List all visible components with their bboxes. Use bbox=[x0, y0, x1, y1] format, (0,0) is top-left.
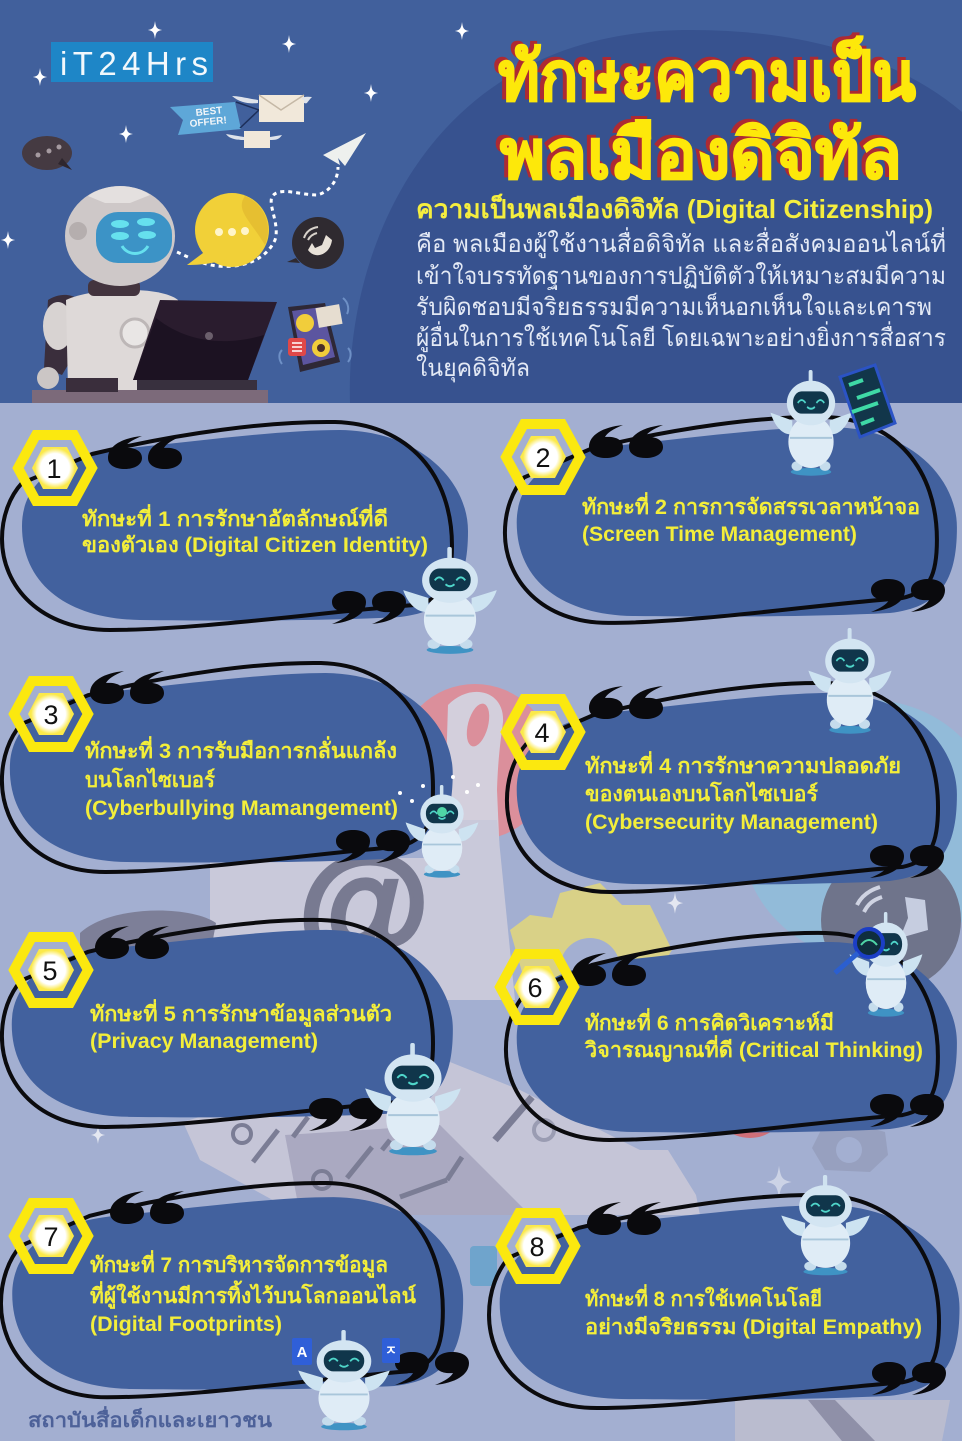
text block: definition: เข้าใจบรรทัดฐานของการปฏิบัติตัวให้เหมาะสมมีความ bbox=[416, 262, 946, 290]
robot 7 with language icons: ㅈ bbox=[385, 1343, 397, 1358]
icon: flying envelopes and offer flag: OFFER! bbox=[189, 115, 227, 130]
icon: flying envelopes and offer flag: BEST bbox=[195, 105, 223, 119]
robot 7 with language icons bbox=[292, 1330, 400, 1430]
text block: definition: ผู้อื่นในการใช้เทคโนโลยี โดยเฉพาะอย่างยิ่งการสื่อสาร bbox=[416, 321, 946, 353]
text block: definition: ในยุคดิจิทัล bbox=[416, 354, 530, 383]
title bbox=[494, 33, 916, 193]
title: พลเมืองดิจิทัล bbox=[496, 114, 898, 190]
icon: dark phone-call bubble bbox=[287, 217, 344, 269]
panel: skill 5: ทักษะที่ 5 การรักษาข้อมูลส่วนตัว bbox=[90, 998, 392, 1028]
icon: flying envelopes and offer flag bbox=[170, 95, 312, 148]
robot 3 with lightbulb bbox=[398, 775, 480, 878]
panel: skill 1 bbox=[2, 422, 468, 630]
panel: skill 2: ทักษะที่ 2 การการจัดสรรเวลาหน้าจอ bbox=[582, 491, 920, 519]
panel: skill 7: 7 bbox=[43, 1222, 59, 1252]
panel: skill 5: (Privacy Management) bbox=[90, 1030, 318, 1053]
panel: skill 2: (Screen Time Management) bbox=[582, 523, 857, 546]
icon: robot with laptop bbox=[32, 186, 277, 403]
panel: skill 5 bbox=[2, 920, 453, 1131]
robot 5 bbox=[365, 1043, 461, 1155]
panel: skill 1: 1 bbox=[46, 454, 62, 484]
robot 7 with language icons: A bbox=[297, 1344, 308, 1361]
panel: skill 4: ทักษะที่ 4 การรักษาความปลอดภัย bbox=[585, 750, 901, 778]
icon: yellow speech bubble bbox=[187, 193, 269, 267]
panel: skill 5: 5 bbox=[42, 956, 58, 986]
robot 2 with tablet bbox=[770, 365, 895, 476]
panel: skill 2: 2 bbox=[535, 443, 551, 473]
panel: skill 8 bbox=[489, 1195, 960, 1408]
panel: skill 7 bbox=[1, 1183, 469, 1397]
robot 8 bbox=[781, 1175, 870, 1275]
panel: skill 3: บนโลกไซเบอร์ bbox=[85, 767, 216, 792]
panel: skill 6: 6 bbox=[527, 973, 543, 1003]
robot 6 with magnifier bbox=[835, 912, 922, 1017]
panel: skill 8: 8 bbox=[529, 1232, 545, 1262]
robot 1 bbox=[403, 547, 497, 654]
panel: skill 3 bbox=[2, 663, 453, 872]
panel: skill 7: ทักษะที่ 7 การบริหารจัดการข้อมูล bbox=[90, 1249, 388, 1279]
text block: definition bbox=[416, 193, 946, 383]
panel: skill 1: ทักษะที่ 1 การรักษาอัตลักษณ์ที่ดี bbox=[82, 503, 388, 531]
logo: iT24Hrs bbox=[60, 45, 208, 82]
panel: skill 6: ทักษะที่ 6 การคิดวิเคราะห์มี bbox=[585, 1007, 834, 1035]
title: พลเมืองดิจิทัล bbox=[500, 117, 902, 193]
panel: skill 4: 4 bbox=[534, 718, 550, 748]
text block: definition: คือ พลเมืองผู้ใช้งานสื่อดิจิทัล และสื่อสังคมออนไลน์ที่ bbox=[416, 227, 946, 259]
icon: paper plane with dashed trail bbox=[177, 133, 366, 266]
panel: skill 7: (Digital Footprints) bbox=[90, 1313, 282, 1336]
panel: skill 8: อย่างมีจริยธรรม (Digital Empathy) bbox=[585, 1315, 922, 1339]
panel: skill 6 bbox=[500, 933, 957, 1140]
footer credit: สถาบันสื่อเด็กและเยาวชน bbox=[28, 1405, 272, 1432]
title: ทักษะความเป็น bbox=[494, 33, 912, 112]
panel: skill 2 bbox=[505, 417, 957, 623]
lower background: @ bbox=[298, 828, 430, 979]
icon: sparkles bbox=[1, 21, 469, 249]
panel: skill 3: 3 bbox=[43, 700, 59, 730]
panel: skill 7: ที่ผู้ใช้งานมีการทิ้งไว้บนโลกออนไลน์ bbox=[90, 1280, 417, 1310]
panel: skill 6: วิจารณญาณที่ดี (Critical Thinking) bbox=[584, 1034, 923, 1063]
panel: skill 3: ทักษะที่ 3 การรับมือการกลั่นแกล้ง bbox=[85, 735, 397, 763]
text block: definition: รับผิดชอบมีจริยธรรมมีความเห็นอกเห็นใจและเคารพ bbox=[416, 292, 932, 321]
panel: skill 4: ของตนเองบนโลกไซเบอร์ bbox=[585, 781, 819, 806]
header panel bbox=[0, 0, 962, 403]
icon: dark chat bubble bbox=[22, 136, 72, 170]
panel: skill 4: (Cybersecurity Management) bbox=[585, 811, 878, 834]
icon: phone with chat bbox=[279, 298, 351, 372]
panel: skill 4 bbox=[506, 683, 957, 892]
title: ทักษะความเป็น bbox=[498, 36, 916, 115]
text block: definition: ความเป็นพลเมืองดิจิทัล (Digital Citizenship) bbox=[416, 193, 933, 224]
robot 4 bbox=[808, 628, 892, 734]
panel: skill 8: ทักษะที่ 8 การใช้เทคโนโลยี bbox=[585, 1283, 822, 1311]
panel: skill 3: (Cyberbullying Mamangement) bbox=[85, 797, 398, 820]
panel: skill 1: ของตัวเอง (Digital Citizen Identity) bbox=[82, 534, 428, 557]
